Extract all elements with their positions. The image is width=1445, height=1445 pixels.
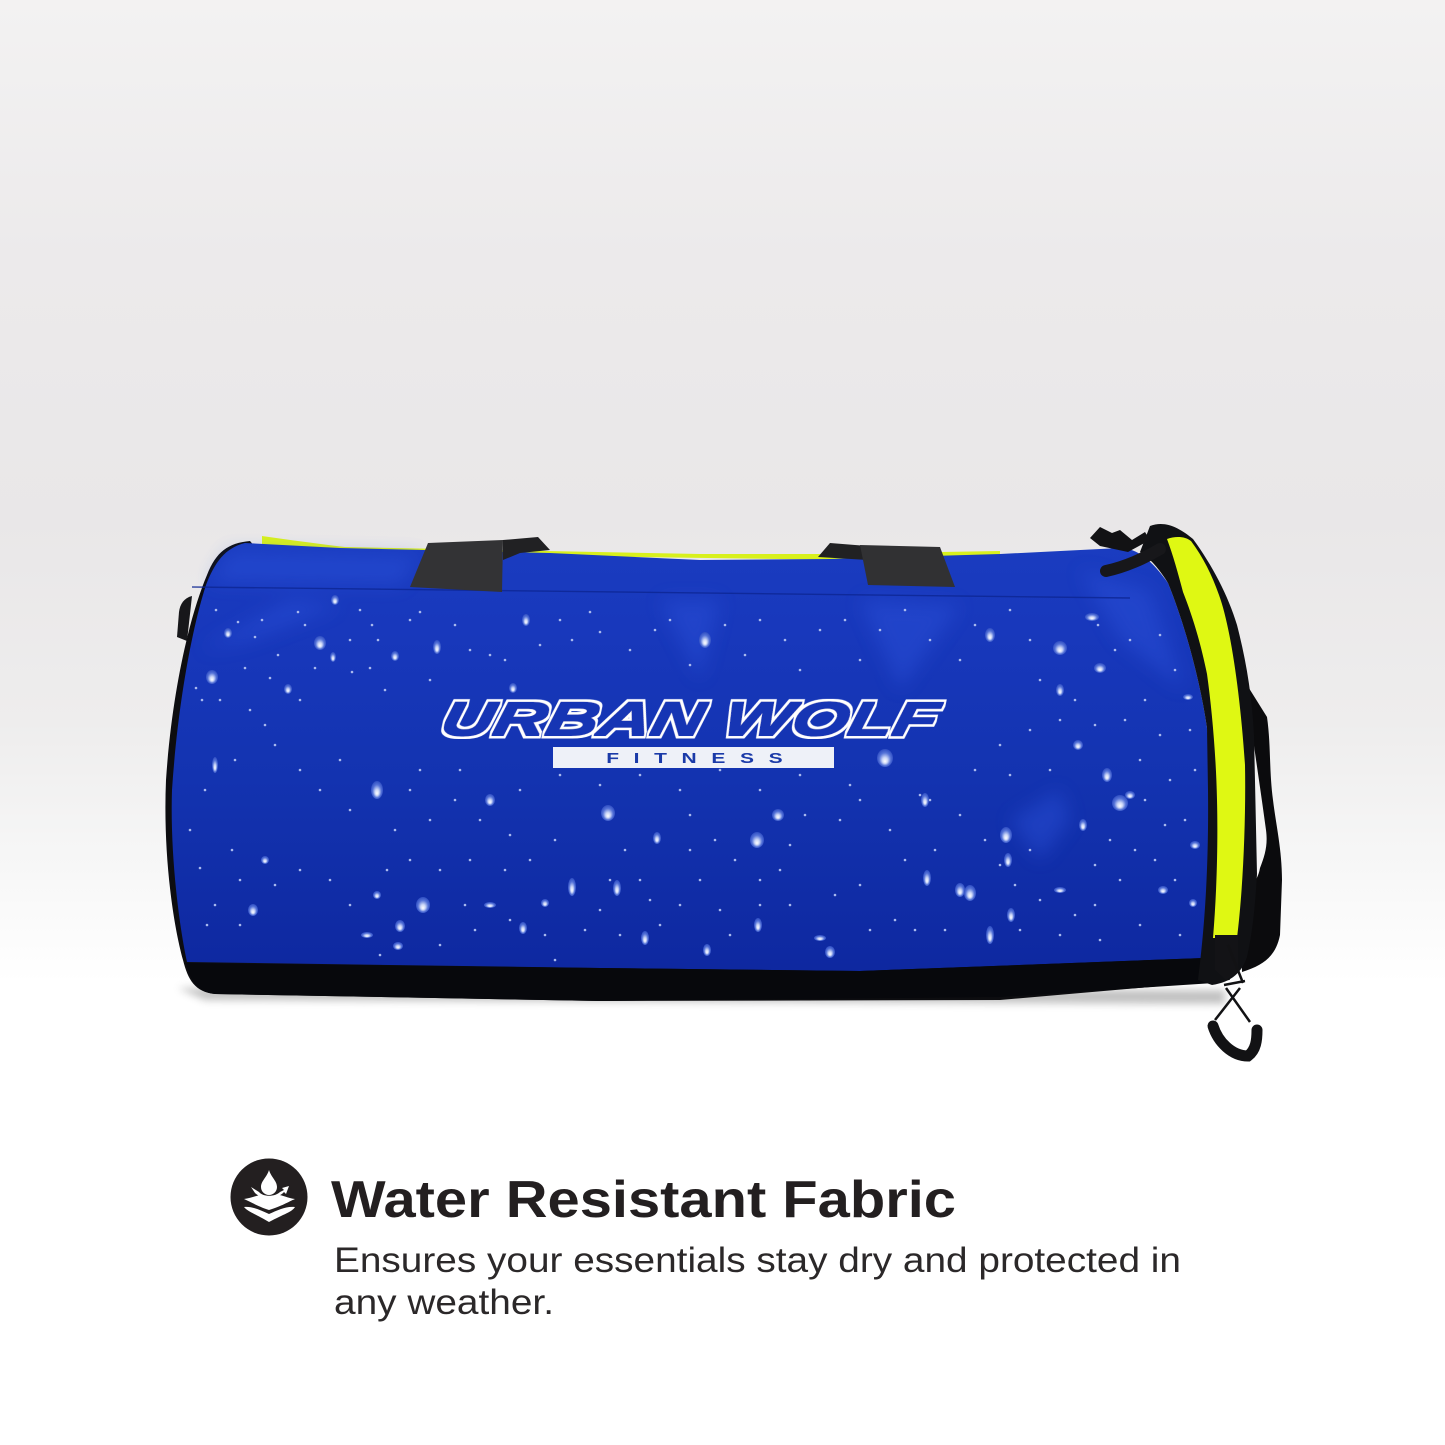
bottom black base xyxy=(186,958,1214,1001)
neon yellow zipper panel xyxy=(1167,537,1245,938)
zipper stop xyxy=(1215,935,1238,980)
top zip pull xyxy=(1090,527,1160,571)
left end strap bump xyxy=(177,596,192,641)
description text: any weather. xyxy=(334,1283,554,1322)
icon: water resistant layers xyxy=(230,1158,308,1236)
logo bar xyxy=(553,747,834,768)
heading: Water Resistant Fabric xyxy=(331,1171,956,1229)
upper panel seam xyxy=(192,587,1130,598)
water droplets xyxy=(190,595,1200,960)
bag black silhouette xyxy=(165,541,1230,1001)
description text: Ensures your essentials stay dry and protected in xyxy=(334,1241,1181,1280)
fabric folds highlights xyxy=(200,552,1185,860)
left handle xyxy=(410,537,550,592)
product photo: duffel bag xyxy=(165,524,1282,1056)
top neon zip edge xyxy=(262,536,1000,562)
floor shadow xyxy=(178,988,1225,1004)
logo sub text: FITNESS: FITNESS xyxy=(606,749,783,766)
description text xyxy=(334,1241,1181,1322)
right handle xyxy=(818,543,955,587)
brand logo: URBAN WOLF: URBAN WOLF xyxy=(436,693,947,746)
blue bag body xyxy=(172,543,1212,971)
shoulder strap xyxy=(1240,685,1282,972)
side black zip band xyxy=(1140,524,1257,985)
bottom zip pull xyxy=(1213,945,1257,1056)
